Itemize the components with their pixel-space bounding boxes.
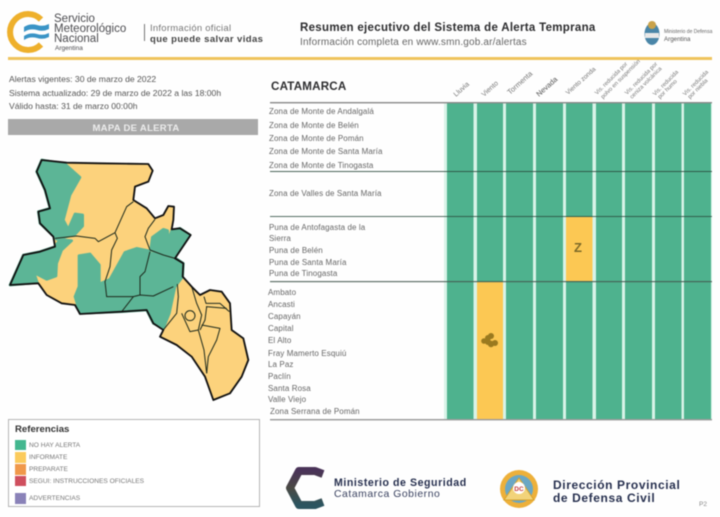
icon: defensa civil badge: DC <box>514 486 524 493</box>
legend: referencias <box>8 420 260 506</box>
zone labels: este: Ancasti <box>268 300 295 309</box>
column headers: phenomena: Viento zonda <box>565 66 598 96</box>
zone labels: puna: Puna de Antofagasta de la <box>269 223 366 232</box>
footer: Defensa Civil: de Defensa Civil <box>553 491 655 505</box>
legend item: advertencias: ADVERTENCIAS <box>29 495 81 502</box>
validity dates: Sistema actualizado: 29 de marzo de 2022 a las 18:00h <box>9 88 221 98</box>
column headers: phenomena: Vis. reducida por <box>624 61 659 96</box>
SMN name: Meteorológico <box>54 23 126 35</box>
map heading <box>8 119 258 135</box>
footer: Defensa Civil <box>500 470 680 508</box>
legend item: preparate <box>15 464 69 475</box>
column headers: phenomena: por humo <box>657 79 679 100</box>
legend item: preparate: PREPARATE <box>29 466 69 473</box>
zone labels: puna: Sierra <box>269 234 291 243</box>
footer: Ministerio de Seguridad <box>290 471 467 505</box>
zone labels: monte <box>269 107 383 170</box>
column headers: phenomena: por niebla <box>687 78 710 100</box>
validity dates: Válido hasta: 31 de marzo 00:00h <box>9 101 138 111</box>
column headers: phenomena: Vis. reducida <box>682 69 711 97</box>
icon: Argentina coat of arms and ministry: Ministerio de Defensa <box>664 29 713 35</box>
icon: Argentina coat of arms and ministry: Argentina <box>664 36 691 43</box>
alert cell: viento, zona este <box>477 282 503 419</box>
column headers: phenomena: Vis. reducida <box>652 69 681 97</box>
zone labels: este: Capital <box>268 324 294 333</box>
footer: Defensa Civil: Dirección Provincial <box>553 478 680 492</box>
SMN name: Nacional <box>54 33 99 45</box>
SMN name: Argentina <box>55 45 83 52</box>
header: SMN logo and tagline <box>10 13 263 52</box>
zone labels: este: La Paz <box>268 360 294 369</box>
column headers: phenomena: Tormenta <box>505 69 535 96</box>
zone labels: puna <box>269 223 366 278</box>
zone labels: puna: Puna de Santa María <box>269 258 347 267</box>
SMN name <box>54 13 126 52</box>
zone labels: este: Fray Mamerto Esquiú <box>268 349 346 358</box>
footer: Ministerio de Seguridad: Ministerio de Seguridad <box>334 477 467 489</box>
zone labels: este: Santa Rosa <box>268 384 311 393</box>
legend item: no hay alerta <box>15 440 81 450</box>
legend item: segui instrucciones <box>15 476 145 486</box>
tagline <box>150 23 263 45</box>
legend item: advertencias <box>15 493 81 504</box>
zone labels: este: Valle Viejo <box>268 395 307 404</box>
icon: SMN logo <box>10 14 49 50</box>
zone labels: este: Paclín <box>268 372 291 381</box>
column headers: phenomena: polvo en suspensión <box>600 59 642 100</box>
column headers: phenomena: Nevada <box>534 74 560 98</box>
page number: P2 <box>699 501 707 508</box>
alert cell: viento zonda, puna <box>566 217 592 281</box>
legend item: no hay alerta: NO HAY ALERTA <box>29 442 81 449</box>
legend item: informate <box>15 452 68 463</box>
alert grid <box>444 102 712 419</box>
zone labels: monte: Zona de Monte de Tinogasta <box>269 161 374 170</box>
gold divider <box>8 57 712 60</box>
column headers: phenomena: ceniza volcánica <box>629 66 664 100</box>
column headers: phenomena: Lluvia <box>453 81 471 98</box>
zone labels: este: Ambato <box>268 288 297 297</box>
zone labels: puna: Puna de Tinogasta <box>269 269 338 278</box>
legend item: informate: INFORMATE <box>29 454 68 461</box>
icon: Argentina coat of arms and ministry <box>644 21 713 45</box>
legend: referencias: Referencias <box>15 424 69 435</box>
zone labels: monte: Zona de Monte de Belén <box>269 121 359 130</box>
column headers: phenomena: Vis. reducida por <box>594 61 629 96</box>
zone labels: este: Zona Serrana de Pomán <box>270 407 360 416</box>
column headers: phenomena <box>453 59 711 100</box>
zone labels: monte: Zona de Monte de Pomán <box>269 134 364 143</box>
zone labels: valles: Zona de Valles de Santa María <box>269 189 382 198</box>
zone labels: monte: Zona de Monte de Santa María <box>269 147 383 156</box>
SMN name: Servicio <box>54 13 95 25</box>
zone labels: este: El Alto <box>268 336 292 345</box>
validity dates <box>9 74 221 111</box>
header: report title: Información completa en www.smn.gob.ar/alertas <box>300 37 527 48</box>
icon: viento <box>481 333 498 347</box>
header: report title: Resumen ejecutivo del Sistema de Alerta Temprana <box>300 22 596 34</box>
icon: ministerio logo <box>290 471 323 505</box>
alert table heading: province: CATAMARCA <box>271 80 347 93</box>
legend item: segui instrucciones: SEGUI: INSTRUCCIONES OFICIALES <box>29 478 145 485</box>
icon: defensa civil badge <box>500 470 538 508</box>
header: report title <box>300 22 596 48</box>
tagline: que puede salvar vidas <box>150 34 263 45</box>
zone labels: monte: Zona de Monte de Andalgalá <box>269 107 374 116</box>
column headers: phenomena: Viento <box>481 80 500 98</box>
tagline: Información oficial <box>150 23 231 34</box>
zone labels: este <box>268 288 360 416</box>
zone labels: puna: Puna de Belén <box>269 246 323 255</box>
icon: viento zonda: Z <box>574 240 582 255</box>
footer: Ministerio de Seguridad: Catamarca Gobierno <box>334 489 440 500</box>
zone labels: este: Capayán <box>268 312 301 321</box>
map: Catamarca alert zones <box>10 160 248 400</box>
table rows dividers <box>270 102 712 420</box>
validity dates: Alertas vigentes: 30 de marzo de 2022 <box>9 74 156 84</box>
map heading: MAPA DE ALERTA <box>92 123 180 134</box>
